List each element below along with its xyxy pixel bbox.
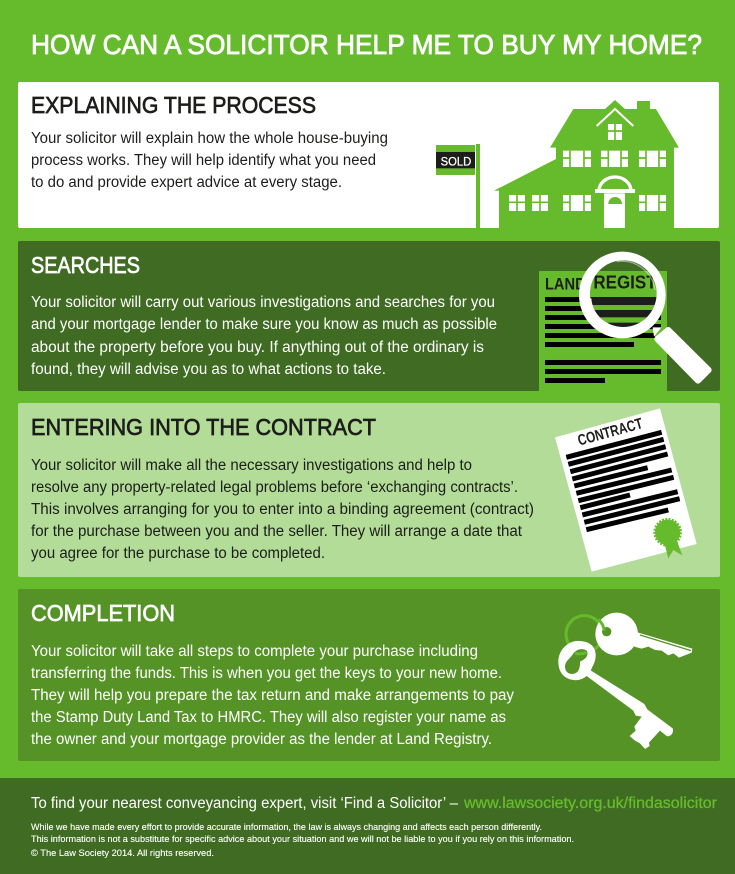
text block: completion — [31, 643, 514, 748]
disclaimer: © The Law Society 2014. All rights reserved. — [31, 848, 214, 858]
text block: searches: found, they will advise you as to what actions to take. — [31, 361, 386, 378]
icon: sold sign: SOLD — [441, 154, 472, 168]
text block: explaining the process: process works. They will help identify what you need — [31, 152, 376, 169]
text block: searches: Your solicitor will carry out various investigations and searches for you — [31, 294, 495, 311]
text block: completion: Your solicitor will take all steps to complete your purchase including — [31, 643, 478, 660]
icon: land registry document under magnifying glass — [539, 252, 709, 391]
disclaimer — [31, 822, 574, 858]
disclaimer: This information is not a substitute for specific advice about your situation and we will not be liable to you if you rely on this information. — [31, 834, 574, 844]
text block: contract: Your solicitor will make all the necessary investigations and help to — [31, 457, 472, 474]
icon: magnifying glass: REGIST — [593, 272, 657, 293]
text block: contract: you agree for the purchase to be completed. — [31, 545, 325, 562]
panel: completion — [18, 589, 720, 761]
text block: searches: and your mortgage lender to make sure you know as much as possible — [31, 316, 497, 333]
ground strip — [18, 228, 719, 241]
text block: explaining the process — [31, 130, 388, 191]
icon: contract document — [555, 408, 697, 572]
text block: contract: This involves arranging for you to enter into a binding agreement (contract) — [31, 501, 534, 518]
website link: www.lawsociety.org.uk/findasolicitor — [463, 795, 717, 812]
text block: completion: the Stamp Duty Land Tax to HMRC. They will also register your name as — [31, 709, 506, 726]
footer panel — [0, 778, 735, 874]
text block: explaining the process: Your solicitor will explain how the whole house-buying — [31, 130, 388, 147]
icon: contract document: CONTRACT — [576, 415, 645, 450]
heading: entering into the contract: ENTERING INTO THE CONTRACT — [31, 414, 376, 440]
heading: searches: SEARCHES — [31, 252, 140, 278]
icon: green seal — [654, 519, 682, 558]
heading: completion: COMPLETION — [31, 600, 175, 626]
panel: explaining the process — [18, 82, 719, 228]
icon: magnifying glass — [579, 252, 709, 381]
title: HOW CAN A SOLICITOR HELP ME TO BUY MY HOME? — [31, 29, 702, 60]
heading: explaining the process: EXPLAINING THE PROCESS — [31, 92, 316, 118]
text block: contract — [31, 457, 534, 562]
icon: keys on a ring — [558, 613, 692, 749]
icon: sold sign — [436, 144, 480, 228]
text block: contract: resolve any property-related legal problems before ‘exchanging contracts’. — [31, 479, 518, 496]
text block: completion: They will help you prepare the tax return and make arrangements to pay — [31, 687, 514, 704]
panel: entering into the contract — [18, 403, 720, 577]
call to action: To find your nearest conveyancing expert, visit ‘Find a Solicitor’ – — [31, 795, 458, 812]
text block: contract: for the purchase between you and the seller. They will arrange a date that — [31, 523, 523, 540]
text block: completion: transferring the funds. This is when you get the keys to your new home. — [31, 665, 502, 682]
disclaimer: While we have made every effort to provide accurate information, the law is always changing and affects each person differently. — [31, 822, 542, 832]
text block: completion: the owner and your mortgage provider as the lender at Land Registry. — [31, 731, 492, 748]
icon: house — [494, 100, 679, 228]
text block: searches: about the property before you buy. If anything out of the ordinary is — [31, 339, 484, 356]
panel: searches — [18, 241, 720, 391]
icon: land registry document under magnifying glass: LAND — [545, 274, 586, 293]
text block: explaining the process: to do and provide expert advice at every stage. — [31, 174, 342, 191]
text block: searches — [31, 294, 497, 378]
